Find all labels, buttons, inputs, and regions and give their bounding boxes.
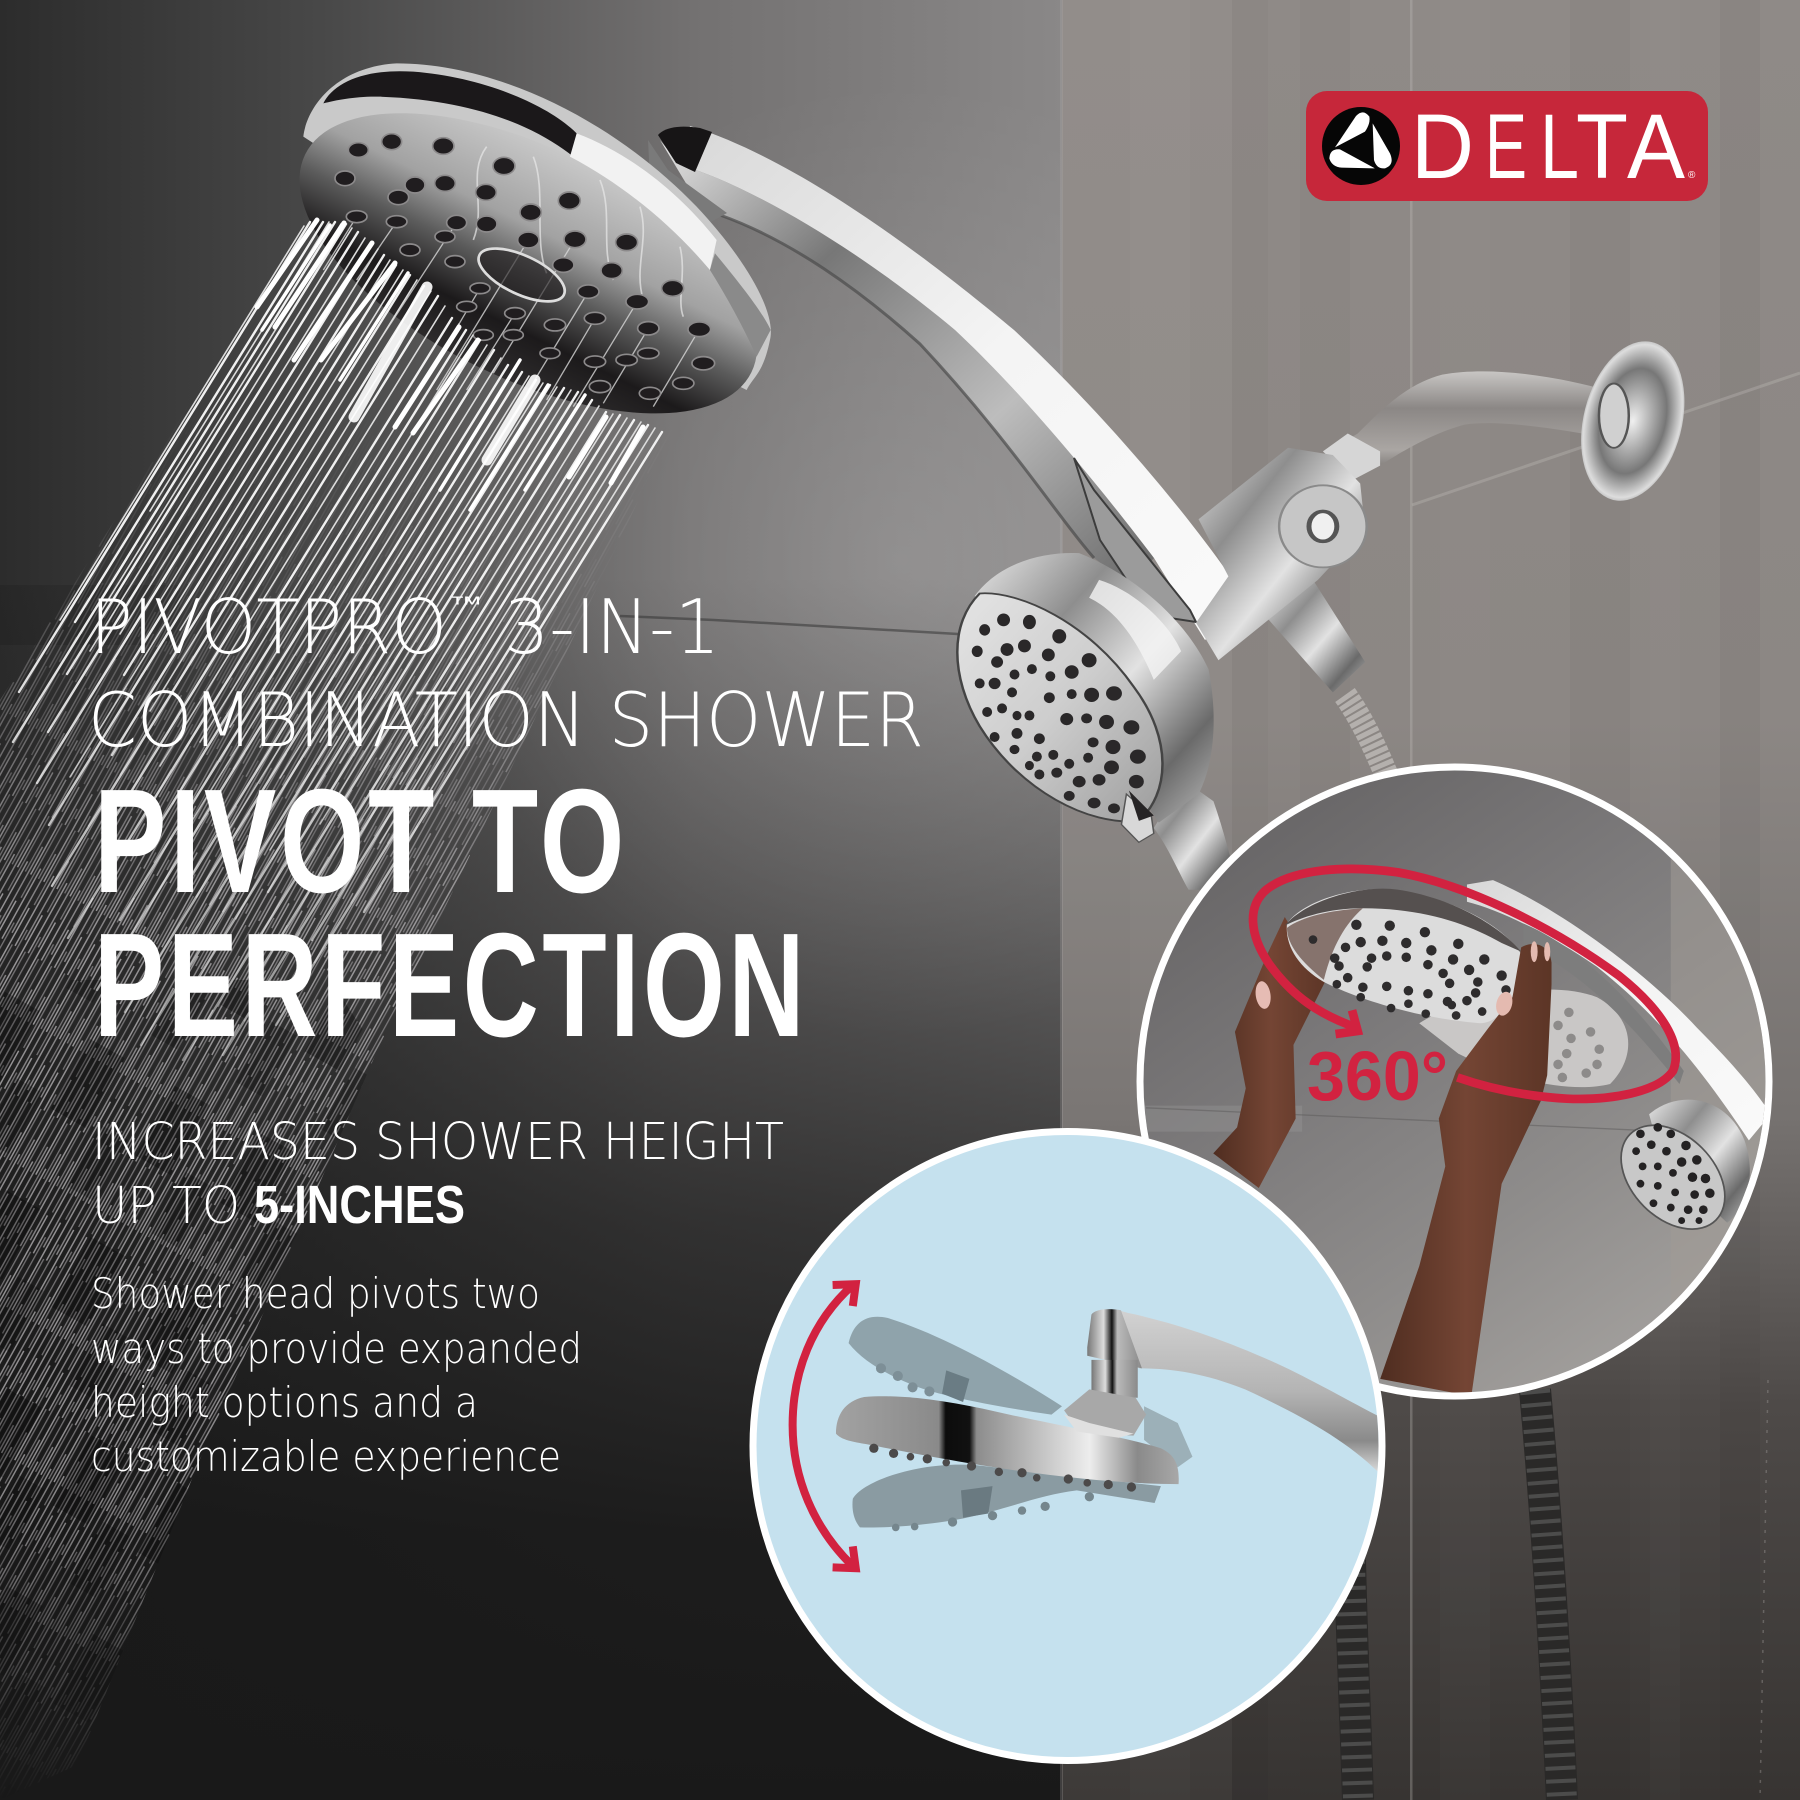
chrome arm — [1110, 1309, 1380, 1474]
ghost upper head — [849, 1317, 1062, 1415]
ghost rotated disc — [1419, 989, 1628, 1087]
panel: pivot up and down inset — [753, 1132, 1382, 1760]
hose upper and lower — [1345, 695, 1562, 1800]
icon: red 360 degree rotation arrow — [1253, 869, 1676, 1099]
rain head from below — [1285, 889, 1521, 1023]
curved arm — [1467, 880, 1771, 1140]
feature text: increases shower height — [92, 1113, 784, 1236]
feature text: increases shower height: 5-INCHES — [254, 1175, 465, 1235]
mounting bracket — [1196, 448, 1367, 660]
water spray texture — [0, 461, 613, 1776]
icon: red pivot double arrow — [793, 1284, 856, 1568]
shower head disc — [255, 51, 802, 476]
swivel neck — [1087, 1309, 1142, 1398]
logo: Delta — [1306, 91, 1708, 201]
subtitle: PivotPro 3-in-1 combination shower: COMBINATION SHOWER — [88, 676, 924, 764]
nail on left hand — [1256, 981, 1271, 1009]
subtitle: PivotPro 3-in-1 combination shower: ™ — [449, 592, 483, 616]
water jets from rain shower head — [13, 220, 662, 1060]
body text: pivot description — [91, 1269, 582, 1481]
panel: 360 degree rotation inset — [1137, 767, 1800, 1396]
hose connector — [1268, 580, 1365, 692]
background: stone tile wall — [1060, 0, 1800, 1800]
subtitle: PivotPro 3-in-1 combination shower: PIVOTPRO — [90, 583, 447, 671]
wall flange — [1568, 337, 1698, 506]
headline: Pivot to Perfection — [94, 759, 808, 1068]
hand shower body — [975, 553, 1214, 823]
headline: Pivot to Perfection: PERFECTION — [94, 903, 808, 1068]
feature text: increases shower height: UP TO — [92, 1177, 240, 1236]
background: dark shower wall — [0, 0, 1066, 1800]
body text: pivot description: ways to provide expanded — [91, 1324, 582, 1373]
main rain shower head — [255, 51, 1240, 640]
logo wordmark: L — [1540, 96, 1579, 198]
feature text: increases shower height: INCREASES SHOWER HEIGHT — [92, 1113, 784, 1172]
label: 360 degrees: 360° — [1307, 1037, 1448, 1115]
nails on right hand — [1494, 941, 1550, 1017]
ghost lower head — [852, 1465, 1161, 1531]
registered mark: ® — [1688, 170, 1696, 181]
shower arm pipe — [1328, 371, 1614, 476]
body text: pivot description: customizable experience — [91, 1432, 561, 1481]
small hand shower — [1620, 1100, 1750, 1230]
hand shower face — [957, 593, 1162, 842]
logo wordmark: T — [1576, 96, 1628, 198]
left hand — [1213, 917, 1328, 1188]
handle of hand shower — [1154, 780, 1238, 890]
logo wordmark: E — [1485, 96, 1527, 198]
arm: curved extension — [648, 126, 1240, 640]
nozzles — [335, 134, 715, 399]
icon: Delta tri-petal mark — [1322, 107, 1400, 185]
logo wordmark: D — [1411, 96, 1474, 198]
subtitle: PivotPro 3-in-1 combination shower: 3-IN-1 — [504, 583, 720, 671]
body text: pivot description: height options and a — [91, 1378, 478, 1427]
logo wordmark — [1411, 96, 1686, 198]
headline: Pivot to Perfection: PIVOT TO — [94, 759, 628, 924]
subtitle: PivotPro 3-in-1 combination shower — [88, 583, 924, 764]
pipe collar — [1323, 434, 1380, 480]
right hand and forearm — [1380, 944, 1552, 1396]
body text: pivot description: Shower head pivots two — [91, 1269, 540, 1318]
logo wordmark: A — [1627, 96, 1686, 198]
wall pipe, bracket, flange and hand shower — [957, 337, 1698, 890]
main disc — [836, 1396, 1179, 1484]
